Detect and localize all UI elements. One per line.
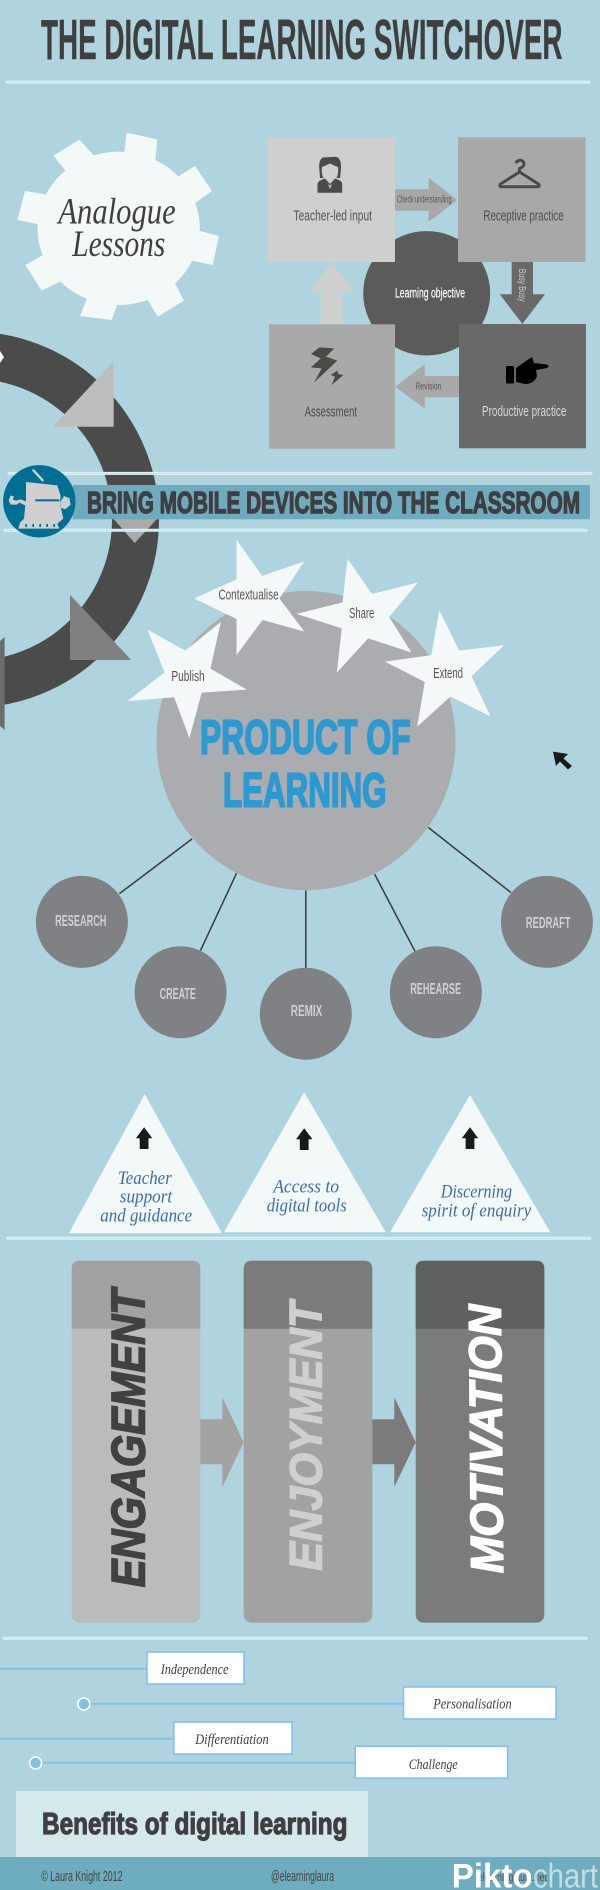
label: independence bbox=[0, 1652, 244, 1684]
learning objective circle: Learning objective bbox=[395, 286, 465, 301]
arrow: check understanding: Check understanding bbox=[397, 195, 452, 206]
icon: gear with Analogue Lessons bbox=[17, 133, 219, 320]
icon: pointing hand bbox=[506, 357, 548, 384]
central circle: LEARNING bbox=[223, 764, 386, 817]
panel: benefits timeline bbox=[0, 1652, 556, 1778]
label: independence: Independence bbox=[160, 1662, 229, 1678]
icon: lightning bbox=[311, 347, 343, 385]
arrow: engagement to enjoyment bbox=[200, 1397, 244, 1487]
circle: redraft bbox=[501, 876, 593, 968]
star: publish: Publish bbox=[171, 668, 205, 685]
label: differentiation: Differentiation bbox=[194, 1732, 269, 1748]
arrow: revision: Revision bbox=[416, 380, 441, 392]
triangle: digital tools: digital tools bbox=[267, 1196, 347, 1217]
box: assessment bbox=[269, 324, 395, 449]
triangle: teacher support: and guidance bbox=[100, 1206, 192, 1227]
panel: engagement bbox=[72, 1261, 200, 1623]
arrow: busy busy: Busy Busy bbox=[516, 269, 528, 302]
icon: hanger bbox=[500, 160, 539, 187]
box: teacher-led input bbox=[268, 138, 395, 262]
arrow: check understanding bbox=[395, 178, 457, 222]
label: challenge bbox=[30, 1746, 508, 1778]
star: share bbox=[297, 559, 418, 673]
star: publish bbox=[127, 622, 247, 738]
star: extend: Extend bbox=[433, 665, 463, 682]
connector lines bbox=[119, 827, 511, 968]
heading: benefits of digital learning bbox=[16, 1791, 368, 1857]
triangle: spirit of enquiry: spirit of enquiry bbox=[422, 1201, 532, 1222]
triangle: teacher support: support bbox=[120, 1187, 173, 1208]
label: personalisation: Personalisation bbox=[432, 1696, 512, 1712]
circle: create: CREATE bbox=[160, 986, 196, 1003]
footer: elearninglaura.net bbox=[478, 1870, 547, 1884]
icon: teacher bbox=[318, 157, 342, 193]
learning objective circle bbox=[363, 231, 490, 356]
triangle: digital tools bbox=[224, 1092, 386, 1232]
label: personalisation bbox=[78, 1687, 556, 1719]
footer: @elearninglaura bbox=[271, 1869, 335, 1885]
arrow: assessment to input bbox=[309, 262, 354, 324]
panel: analogue lesson cycle bbox=[268, 137, 586, 449]
circle: rehearse: REHEARSE bbox=[410, 981, 461, 998]
label: challenge: Challenge bbox=[409, 1757, 458, 1773]
triangle: teacher support bbox=[69, 1094, 222, 1233]
circle: research: RESEARCH bbox=[55, 913, 106, 930]
central circle bbox=[156, 591, 456, 890]
icon: robot badge bbox=[3, 465, 76, 538]
star: share: Share bbox=[349, 605, 374, 622]
panel: three foundations bbox=[69, 1092, 550, 1233]
panel: enjoyment: ENJOYMENT bbox=[280, 1298, 332, 1571]
panel: motivation bbox=[416, 1261, 544, 1623]
label: differentiation bbox=[0, 1722, 292, 1754]
central circle: PRODUCT OF bbox=[200, 712, 411, 764]
arrow: revision bbox=[395, 364, 459, 409]
panel: product of learning bbox=[36, 540, 593, 1060]
panel: motivation: MOTIVATION bbox=[459, 1303, 513, 1574]
circle: remix: REMIX bbox=[291, 1003, 323, 1020]
circle: redraft: REDRAFT bbox=[526, 915, 571, 932]
box: teacher-led input: Teacher-led input bbox=[294, 208, 373, 225]
circle: rehearse bbox=[390, 946, 482, 1038]
panel: engagement: ENGAGEMENT bbox=[102, 1286, 154, 1587]
box: receptive practice bbox=[458, 137, 586, 262]
circle: create bbox=[135, 946, 227, 1038]
arrow: busy busy bbox=[500, 262, 545, 324]
icon: gear with Analogue Lessons: Analogue bbox=[56, 191, 176, 232]
panel: enjoyment bbox=[244, 1261, 372, 1623]
circle: remix bbox=[260, 968, 352, 1060]
footer bbox=[0, 1857, 600, 1890]
logo: Piktochart bbox=[452, 1858, 598, 1890]
icon: gear with Analogue Lessons: Lessons bbox=[72, 224, 165, 265]
icon: cursor arrow bbox=[553, 752, 572, 770]
heading: benefits of digital learning: Benefits of digital learning bbox=[42, 1806, 348, 1841]
triangle: digital tools: Access to bbox=[271, 1176, 339, 1197]
triangle: spirit of enquiry bbox=[390, 1095, 550, 1232]
box: assessment: Assessment bbox=[305, 404, 358, 421]
triangle: spirit of enquiry: Discerning bbox=[440, 1181, 512, 1202]
box: productive practice bbox=[459, 324, 586, 448]
star: extend bbox=[385, 610, 504, 727]
star: contextualise: Contextualise bbox=[218, 587, 279, 604]
circular arrow ring bbox=[0, 351, 157, 730]
triangle: teacher support: Teacher bbox=[118, 1168, 172, 1189]
star: contextualise bbox=[194, 540, 304, 655]
arrow: enjoyment to motivation bbox=[372, 1397, 416, 1487]
footer: © Laura Knight 2012 bbox=[41, 1869, 122, 1885]
circle: research bbox=[36, 876, 128, 968]
